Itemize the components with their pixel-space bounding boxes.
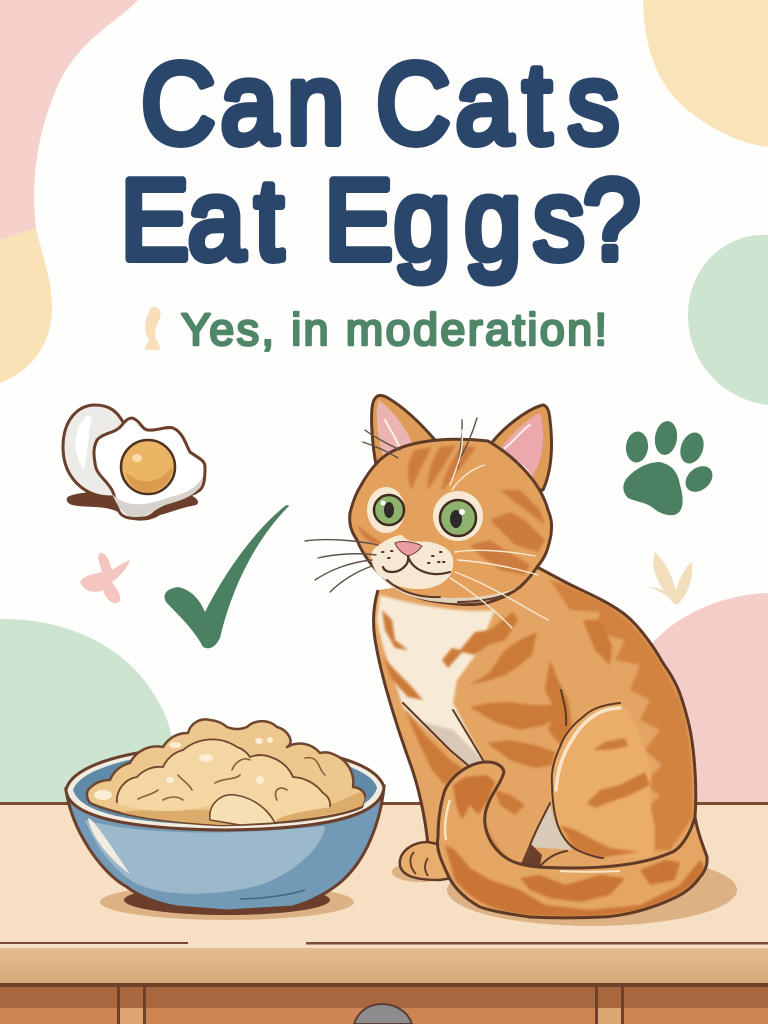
icon: eggs — [63, 405, 205, 521]
chest shading — [422, 722, 483, 766]
hind leg — [552, 703, 655, 858]
whiskers — [305, 418, 548, 628]
background blobs — [0, 0, 768, 805]
title — [121, 40, 640, 283]
tail — [437, 762, 707, 918]
icon: small leaf — [145, 307, 161, 350]
leg gap — [530, 803, 573, 850]
head stripes — [358, 445, 545, 575]
title: Can Cats — [141, 40, 619, 167]
icon: pink sparkle — [80, 553, 130, 603]
cat head — [350, 439, 552, 605]
icon: golden leaves — [648, 552, 692, 605]
nose and mouth — [382, 542, 450, 574]
leg outlines — [403, 690, 620, 866]
icon: paw print — [623, 420, 718, 515]
front paw — [400, 842, 452, 880]
bowl body — [66, 787, 384, 911]
subtitle text: Yes, in moderation! — [181, 304, 607, 355]
tail outline — [437, 762, 707, 918]
back shading — [550, 580, 693, 850]
table — [0, 802, 768, 1024]
icon: check mark — [164, 505, 289, 648]
title: Eat Eggs? — [121, 156, 640, 283]
bowl rim — [66, 753, 384, 830]
eyes — [367, 487, 483, 541]
drawer knob — [354, 1004, 412, 1024]
chest fur — [377, 595, 495, 765]
table top — [0, 805, 768, 949]
bowl shadow — [100, 884, 354, 920]
hind foot — [540, 851, 610, 868]
cat body outline — [374, 567, 707, 857]
drawers — [0, 983, 768, 1024]
muzzle — [371, 535, 453, 589]
cat ears — [372, 395, 552, 490]
bowl — [66, 719, 384, 920]
scrambled egg food — [87, 719, 365, 825]
subtitle — [145, 304, 607, 355]
cat body — [374, 567, 707, 880]
cat — [305, 395, 737, 926]
fur stripes — [382, 610, 650, 862]
cat shadow — [447, 854, 737, 926]
table edge band — [0, 948, 768, 984]
